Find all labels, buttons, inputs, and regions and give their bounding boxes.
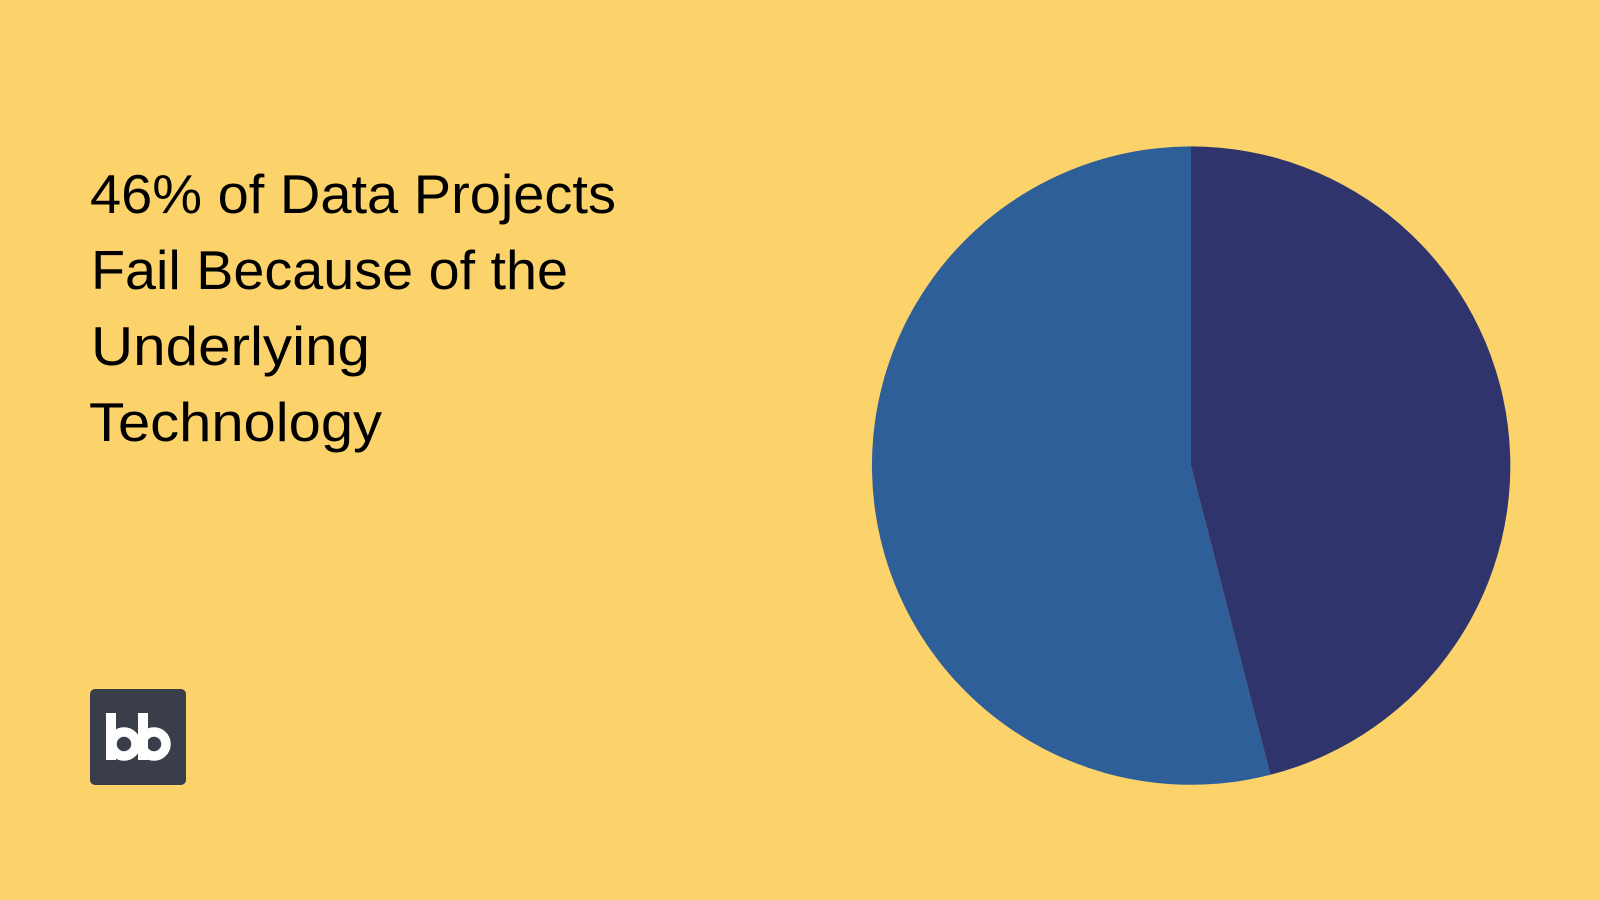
title: 46% of Data Projects [90,163,616,225]
pie slice: 46% underlying technology [1191,146,1510,775]
pie chart [872,146,1510,785]
title: Fail Because of the [91,239,568,301]
title: Underlying [91,315,370,377]
logo: bb [90,689,186,785]
title [89,163,616,453]
pie slice: other 54% [872,146,1270,785]
title: Technology [89,391,383,453]
